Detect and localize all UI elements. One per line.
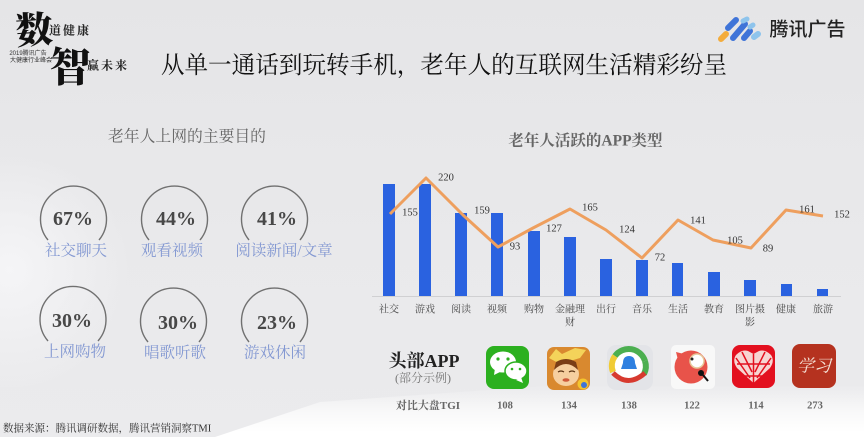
category labels: 金融理 [555, 302, 585, 316]
TGI values: 273 [807, 400, 823, 412]
category labels: 视频 [487, 302, 508, 316]
line values: 89 [763, 244, 773, 254]
icon: Xuexi: 学习 [797, 356, 833, 376]
stat: social chat 67% [40, 186, 107, 260]
event logo: calligraphy: 数 [14, 0, 54, 55]
brand logo: Tencent Ads: 腾讯广告 [769, 18, 846, 40]
category labels [379, 302, 833, 328]
line values: 155 [402, 208, 418, 218]
category labels: 旅游 [813, 302, 833, 316]
icon: card game [547, 347, 590, 390]
panel: top apps [388, 344, 836, 412]
event logo: calligraphy: 赢未来 [87, 56, 129, 74]
TGI values [497, 400, 823, 412]
category labels: 图片摄 [735, 302, 765, 316]
footer: data source: 数据来源：腾讯调研数据，腾讯营销洞察TMI [3, 422, 212, 434]
TGI values: 108 [497, 400, 513, 412]
line values: 141 [690, 216, 706, 226]
panel: purposes of going online [40, 126, 333, 362]
category labels: 健康 [776, 302, 796, 316]
category labels: 社交 [379, 302, 399, 316]
stat: games 23%: 23% [257, 312, 297, 334]
icon: red bird search [671, 345, 715, 389]
stat: reading news 41%: 41% [257, 208, 297, 230]
stat: social chat 67%: 社交聊天 [45, 242, 107, 260]
note: partial examples: (部分示例) [395, 370, 451, 385]
TGI values: 134 [561, 400, 578, 412]
event logo: calligraphy [9, 0, 129, 93]
title: 从单一通话到玩转手机，老年人的互联网生活精彩纷呈 [161, 52, 727, 79]
bars [383, 184, 828, 296]
line values: 105 [727, 236, 743, 246]
category labels: 阅读 [451, 302, 471, 316]
icon: Pinduoduo [732, 345, 775, 388]
category labels: 财 [565, 316, 575, 328]
line values: 93 [510, 242, 520, 252]
stat: reading news 41% [235, 186, 333, 260]
line values: 220 [438, 172, 454, 184]
stat: games 23% [242, 288, 308, 362]
stat: watching video 44%: 44% [156, 208, 196, 230]
heading: top apps: 头部APP [388, 350, 460, 371]
stat: social chat 67%: 67% [53, 208, 93, 230]
stat: singing 30%: 30% [158, 312, 198, 334]
TGI values: 138 [621, 400, 637, 412]
stat: singing 30% [140, 288, 206, 362]
line values: 159 [474, 206, 490, 216]
category labels: 生活 [668, 302, 688, 316]
heading: purposes: 老年人上网的主要目的 [108, 126, 266, 146]
event logo: calligraphy: 智 [50, 34, 90, 94]
TGI values: 114 [748, 400, 764, 412]
icon: Xuexi [792, 344, 836, 388]
stat: singing 30%: 唱歌听歌 [144, 344, 206, 362]
line values: 72 [655, 252, 665, 264]
icon: logo bars [721, 19, 758, 39]
label: TGI: 对比大盘TGI [396, 398, 460, 412]
stat: games 23%: 游戏休闲 [244, 344, 306, 362]
line values: 127 [546, 224, 562, 234]
event logo: calligraphy: 道健康 [49, 22, 91, 38]
stat: online shopping 30% [40, 286, 106, 360]
stat: reading news 41%: 阅读新闻/文章 [235, 240, 333, 260]
icon: Tencent News [607, 345, 653, 390]
line: TGI [390, 178, 823, 258]
category labels: 教育 [704, 302, 724, 316]
line values: 124 [619, 224, 636, 236]
line values: 152 [834, 210, 850, 220]
category labels: 购物 [524, 302, 544, 316]
stat: watching video 44%: 观看视频 [141, 242, 203, 260]
line values [402, 172, 850, 264]
category labels: 出行 [596, 302, 616, 316]
category labels: 影 [745, 316, 755, 328]
category labels: 游戏 [415, 302, 435, 316]
line values: 161 [799, 204, 815, 216]
event logo: calligraphy: 大健康行业峰会 [10, 56, 52, 64]
event logo: calligraphy: 2019腾讯广告 [9, 49, 47, 57]
panel: active app types chart [372, 130, 850, 328]
TGI values: 122 [684, 400, 700, 412]
stat: online shopping 30%: 上网购物 [44, 342, 106, 360]
category labels: 音乐 [632, 302, 653, 316]
stat: online shopping 30%: 30% [52, 310, 92, 332]
brand logo: Tencent Ads [721, 18, 846, 40]
heading: active app types: 老年人活跃的APP类型 [508, 130, 663, 150]
stat: watching video 44% [141, 186, 208, 260]
line values: 165 [582, 202, 598, 214]
icon: WeChat [486, 346, 529, 389]
